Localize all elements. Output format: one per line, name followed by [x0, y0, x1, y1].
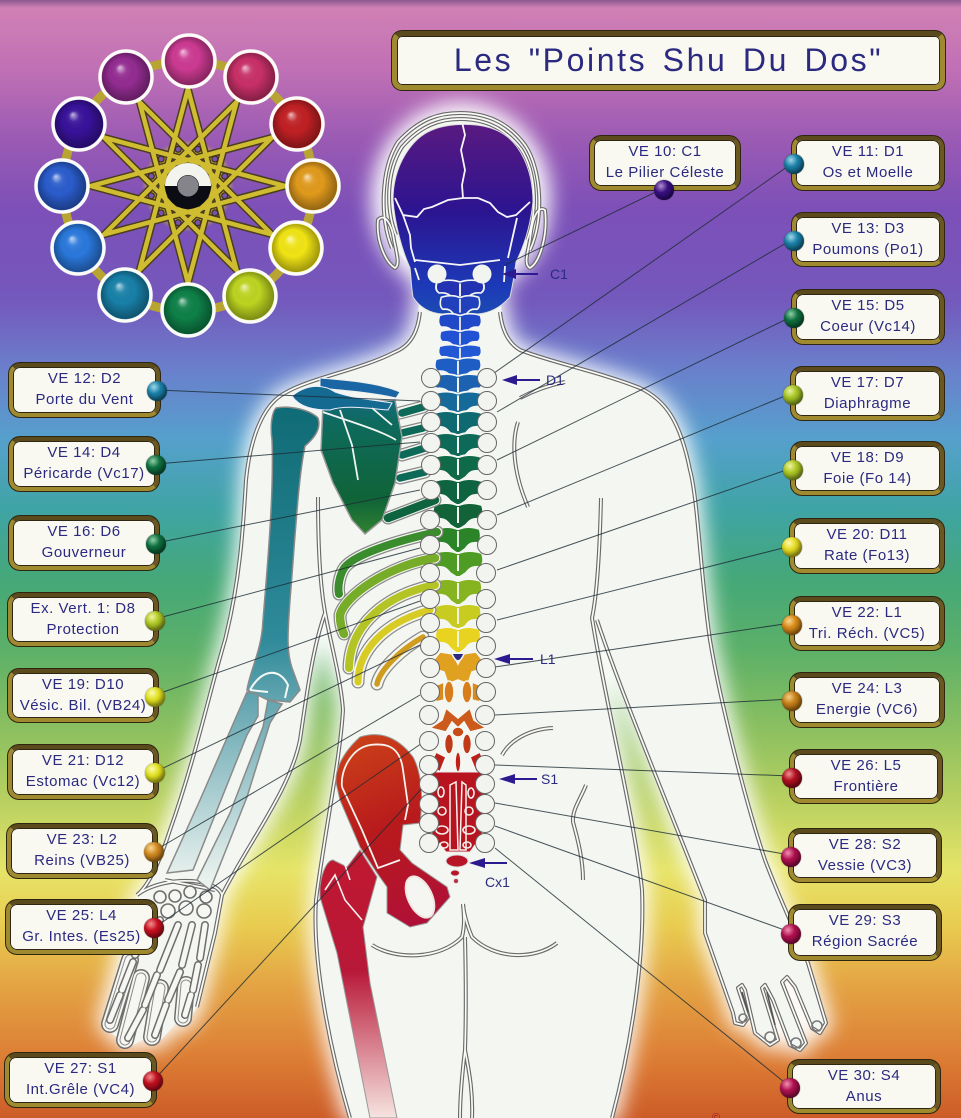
- orbs: [36, 35, 339, 336]
- body silhouette: [103, 113, 826, 1118]
- label: VE 10: Le Pilier Céleste: [606, 164, 724, 181]
- label: VE 11: [792, 136, 944, 190]
- label: VE 10: VE 10: C1: [628, 143, 702, 160]
- arrow: Cx1: [469, 858, 510, 890]
- arrow: C1: [502, 266, 568, 282]
- spine points: [420, 264, 496, 852]
- label: VE 19: [8, 669, 158, 722]
- label: VE 18: Foie (Fo 14): [823, 470, 912, 487]
- label: VE 24: [790, 673, 944, 727]
- arrow: S1: S1: [541, 771, 558, 787]
- label: VE 24: Energie (VC6): [816, 701, 918, 718]
- leader lines: [153, 162, 794, 1086]
- label: VE 12: [9, 363, 160, 417]
- label: VE 19: VE 19: D10: [42, 676, 124, 693]
- label: VE 29: [789, 905, 941, 960]
- label: VE 21: VE 21: D12: [42, 752, 124, 769]
- label: VE 24: VE 24: L3: [832, 680, 902, 697]
- arrow: L1: [494, 651, 556, 667]
- label: VE 30: Anus: [846, 1088, 882, 1105]
- pelvis: [325, 735, 450, 927]
- label: VE 15: [792, 290, 944, 344]
- label: VE 26: Frontière: [834, 778, 898, 795]
- arrow: D1: [502, 372, 564, 388]
- ribs: [338, 407, 437, 684]
- label: VE 22: [790, 597, 944, 650]
- label: VE 26: VE 26: L5: [831, 757, 901, 774]
- label: VE 20: [790, 519, 944, 573]
- label: VE 25: Gr. Intes. (Es25): [22, 928, 141, 945]
- label: VE 17: Diaphragme: [824, 395, 911, 412]
- arrow: C1: C1: [550, 266, 568, 282]
- arrow: Cx1: Cx1: [485, 874, 510, 890]
- wheel ring: [63, 61, 313, 311]
- label: VE 29: Région Sacrée: [812, 933, 918, 950]
- right hand fingernails: [739, 992, 822, 1048]
- label: VE 25: VE 25: L4: [46, 907, 117, 924]
- label: VE 16: Gouverneur: [42, 544, 126, 561]
- label: VE 28: Vessie (VC3): [818, 857, 912, 874]
- label: VE 21: Estomac (Vc12): [26, 773, 140, 790]
- label: VE 13: [792, 213, 944, 266]
- sacrum: [428, 772, 488, 852]
- label: VE 23: VE 23: L2: [47, 831, 117, 848]
- star: [91, 89, 285, 283]
- femur: [320, 850, 397, 1118]
- arm bones: [167, 407, 319, 890]
- label: VE 16: VE 16: D6: [47, 523, 121, 540]
- label: VE 22: VE 22: L1: [832, 604, 902, 621]
- label: VE 11: Os et Moelle: [823, 164, 913, 181]
- centre yin yang: [165, 163, 211, 209]
- hand bones: [110, 886, 212, 1040]
- label: VE 18: VE 18: D9: [831, 449, 904, 466]
- label: VE 14: [9, 437, 159, 491]
- label: VE 23: [7, 824, 157, 878]
- label: VE 29: VE 29: S3: [829, 912, 901, 929]
- label: Ex. Vert. 1: [8, 593, 158, 646]
- cervical vertebrae: [436, 280, 484, 364]
- label: VE 27: Int.Grêle (VC4): [26, 1081, 135, 1098]
- chakra wheel: [36, 35, 339, 336]
- label: Ex. Vert. 1: Protection: [46, 621, 120, 638]
- label: VE 15: VE 15: D5: [831, 297, 905, 314]
- label: VE 21: [8, 745, 158, 799]
- label: VE 13: VE 13: D3: [831, 220, 905, 237]
- label: VE 30: [788, 1060, 940, 1113]
- label: VE 23: Reins (VB25): [34, 852, 130, 869]
- coccyx: [446, 855, 468, 884]
- skull: [393, 122, 533, 314]
- title: Les "Points Shu Du Dos": [454, 42, 883, 78]
- white body glow: [103, 108, 826, 1118]
- lumbar vertebrae: [428, 652, 488, 772]
- arrow: L1: L1: [540, 651, 556, 667]
- label: VE 11: VE 11: D1: [832, 143, 904, 160]
- title: [392, 31, 945, 90]
- label: VE 19: Vésic. Bil. (VB24): [20, 697, 146, 714]
- label: VE 12: Porte du Vent: [35, 391, 134, 408]
- label: VE 17: VE 17: D7: [831, 374, 904, 391]
- label: VE 12: VE 12: D2: [48, 370, 121, 387]
- arrow: D1: D1: [546, 372, 564, 388]
- label: VE 10: [590, 136, 740, 190]
- label: VE 28: VE 28: S2: [829, 836, 901, 853]
- label: VE 13: Poumons (Po1): [812, 241, 924, 258]
- label: VE 14: Péricarde (Vc17): [23, 465, 145, 482]
- body outline: [137, 113, 826, 1118]
- label: VE 14: VE 14: D4: [47, 444, 121, 461]
- label: VE 17: [791, 367, 944, 420]
- label: VE 15: Coeur (Vc14): [820, 318, 916, 335]
- label: VE 22: Tri. Réch. (VC5): [809, 625, 925, 642]
- scapula and clavicle: [292, 378, 402, 534]
- label: VE 28: [789, 829, 941, 882]
- label: VE 26: [790, 750, 942, 803]
- label: VE 27: [5, 1053, 156, 1107]
- label: VE 18: [791, 442, 944, 495]
- label: VE 25: [6, 900, 157, 954]
- label: VE 27: VE 27: S1: [44, 1060, 117, 1077]
- arrow: S1: [499, 771, 558, 787]
- label: Ex. Vert. 1: Ex. Vert. 1: D8: [31, 600, 135, 617]
- label: VE 20: Rate (Fo13): [824, 547, 910, 564]
- label: VE 30: VE 30: S4: [828, 1067, 900, 1084]
- thoracic vertebrae: [432, 358, 484, 653]
- label: VE 20: VE 20: D11: [826, 526, 908, 543]
- label: VE 16: [9, 516, 159, 570]
